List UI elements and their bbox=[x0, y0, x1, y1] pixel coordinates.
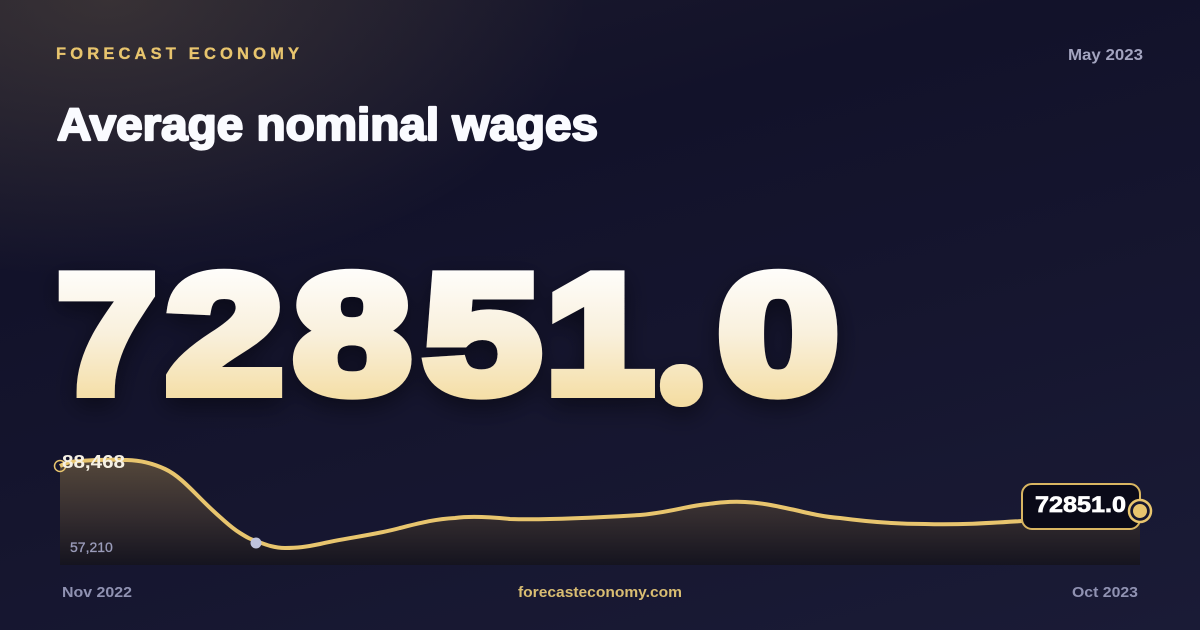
value callout bbox=[1022, 484, 1140, 529]
title: Average nominal wages bbox=[57, 99, 598, 150]
end marker bbox=[1129, 500, 1151, 522]
headline value: 1 bbox=[546, 241, 653, 428]
chart area fill bbox=[60, 460, 1140, 565]
minimum label: 57,210 bbox=[70, 539, 113, 555]
headline value: 285 bbox=[166, 241, 541, 428]
headline value: . bbox=[679, 370, 684, 392]
area chart bbox=[54, 452, 1140, 565]
headline value: 0 bbox=[718, 240, 839, 428]
headline value bbox=[57, 240, 839, 428]
brand label: FORECAST ECONOMY bbox=[56, 45, 299, 63]
end date: Oct 2023 bbox=[1072, 585, 1138, 601]
headline value: 7 bbox=[57, 240, 156, 428]
start marker bbox=[54, 460, 66, 472]
report date: May 2023 bbox=[1068, 47, 1143, 64]
start date: Nov 2022 bbox=[62, 585, 132, 601]
trend line bbox=[60, 460, 1022, 548]
value callout: 72851.0 bbox=[1035, 492, 1126, 517]
minimum marker bbox=[250, 538, 262, 548]
source website: forecasteconomy.com bbox=[518, 585, 682, 601]
maximum label: 88,468 bbox=[62, 452, 125, 472]
